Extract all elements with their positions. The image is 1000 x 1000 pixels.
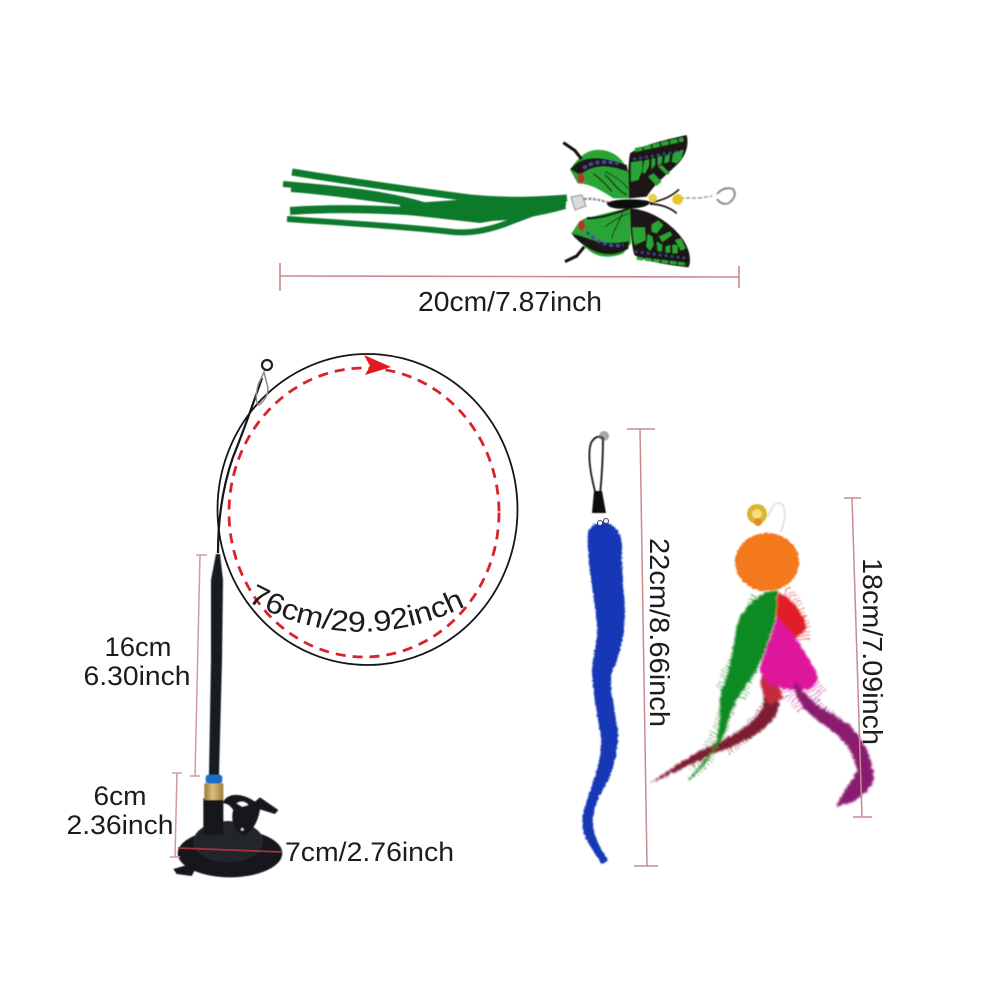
label: 22cm/8.66inch: 22cm/8.66inch <box>644 538 675 727</box>
label: 20cm/7.87inch: 20cm/7.87inch <box>418 286 602 317</box>
bell and loop <box>747 503 785 532</box>
label: 16cm 6.30inch: 16cm <box>104 632 172 662</box>
orange pompom <box>735 533 799 591</box>
feather toy <box>650 503 874 806</box>
suction lever <box>223 795 278 835</box>
label: 6cm 2.36inch <box>66 781 174 840</box>
metal connector and chain <box>571 188 735 210</box>
red dashed measure loop with arrow <box>229 355 499 657</box>
label: 16cm 6.30inch <box>84 632 190 691</box>
ruler: 22cm <box>627 429 658 866</box>
ruler: 7cm base width <box>178 848 282 852</box>
label: 18cm/7.09inch: 18cm/7.09inch <box>857 558 888 745</box>
hindwing top <box>563 143 629 198</box>
ruler: 18cm <box>844 498 872 817</box>
feather barbs <box>695 595 864 772</box>
forewing top <box>628 135 688 198</box>
worm toy <box>582 431 625 864</box>
wand: wire loop <box>218 354 518 665</box>
hindwing bottom <box>565 208 631 262</box>
blue fuzzy body <box>582 522 625 864</box>
snap hook <box>256 360 272 405</box>
feathers <box>650 590 874 806</box>
label: 6cm 2.36inch: 6cm <box>94 781 146 811</box>
label: 76cm/29.92inch: 76cm/29.92inch <box>252 584 464 632</box>
ruler: 16cm <box>190 555 207 776</box>
blue ring <box>206 775 222 784</box>
label: 7cm/2.76inch: 7cm/2.76inch <box>285 837 454 867</box>
ruler: 20cm <box>280 263 739 291</box>
label: 6cm 2.36inch: 2.36inch <box>66 810 174 840</box>
butterfly wings <box>563 135 690 267</box>
butterfly body and antennae <box>607 189 683 213</box>
label: 16cm 6.30inch: 6.30inch <box>84 661 190 691</box>
neck <box>203 798 223 835</box>
suction cup <box>173 821 282 877</box>
forewing bottom <box>630 208 690 267</box>
bell and cord <box>589 431 609 513</box>
brass fitting <box>204 783 223 800</box>
wand: rod and suction base <box>173 554 282 877</box>
butterfly toy <box>283 135 735 267</box>
eyes <box>597 518 609 526</box>
green ribbons <box>283 172 567 232</box>
ruler: 6cm <box>170 773 182 857</box>
